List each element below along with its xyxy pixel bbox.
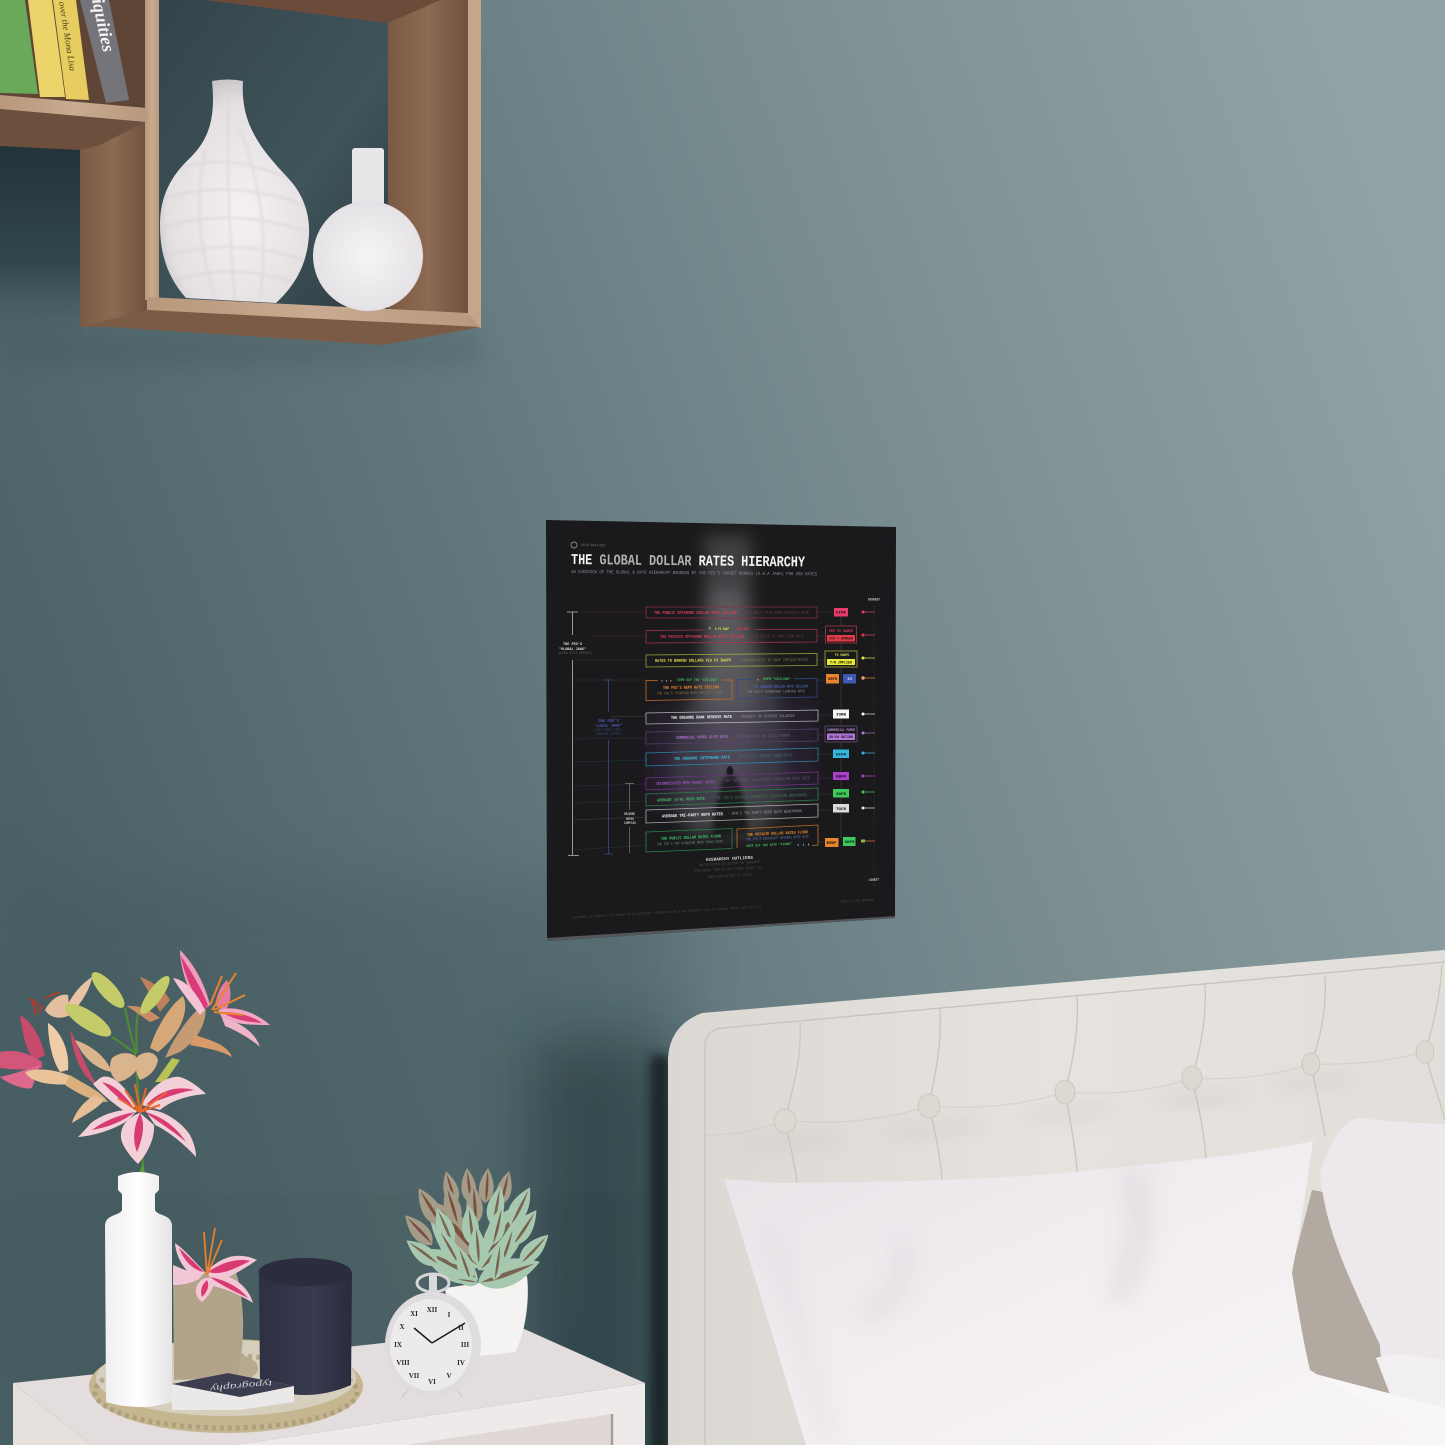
clock: hands (414, 1323, 465, 1343)
tag: commercial paper (825, 726, 857, 742)
tag: Fed FX swaps: FED FX SWAPS (829, 630, 853, 634)
plant: layered leaves (399, 1167, 554, 1288)
shelf: left column (80, 122, 147, 327)
left bracket: local jaws: (FED FUNDS CORR. (594, 727, 623, 732)
row: onshore bank reserve rate (646, 710, 818, 724)
nightstand: front band (235, 1383, 645, 1445)
row: intermediated repo market: - BNY OVERNIGHT COLLATERAL FINANCING REPO RATE (721, 776, 810, 784)
tag: EFFR: EFFR (836, 754, 847, 758)
pillow: main (724, 1141, 1412, 1445)
shelf: upper-left recess (0, 0, 145, 110)
bed: sheet (1300, 1370, 1445, 1445)
lily: small pink (173, 1228, 257, 1303)
tag: OBFR (833, 772, 849, 780)
tan pot (173, 1272, 243, 1380)
row: commercial paper: COMMERCIAL PAPER A2/P2 RATE (676, 735, 728, 741)
pillow: right lower (1376, 1355, 1445, 1410)
book: yellow spine (53, 0, 89, 100)
lily: large pink (78, 1077, 206, 1178)
disclaimer: DISCLAIMER: THIS GRAPHIC IS FOR INFORMATION AND EDUCATIONAL PURPOSES ONLY AND IS NOT INVESTMENT, LEGAL OR FINANCIAL ADVICE. VERIFY ALL DATA. (572, 905, 763, 919)
tag: SOFR ceiling (826, 674, 839, 684)
headboard: inner piping (705, 962, 1445, 1445)
tag: TGCR floor: SOFR (844, 841, 855, 845)
right scale: lowest label (869, 878, 880, 888)
poster: background (546, 520, 896, 941)
title: THE GLOBAL DOLLAR RATES HIERARCHY (571, 552, 805, 571)
shelf: left board top (0, 95, 147, 122)
right scale: lowest label: LOWEST (869, 878, 880, 883)
lily: centre peach (75, 1040, 158, 1082)
book on tray (172, 1373, 294, 1410)
row: onshore bank reserve rate: THE ONSHORE BANK RESERVE RATE (671, 715, 732, 721)
row: private offshore dollar rate ceiling: - THE FED'S FX SWAP LINE RATE (749, 634, 804, 639)
row: fed's repo rate ceiling (646, 678, 732, 700)
clock: numerals: XII (427, 1306, 438, 1314)
headboard: soft tufting shade (735, 1071, 1361, 1155)
subtitle: AN OVERVIEW OF THE GLOBAL $ RATE HIERARCHY BOUNDED BY THE FED'S TARGET RANGES (A.K.A JAWS) FOR USD RATES (571, 569, 817, 577)
clock: numerals: III (461, 1341, 469, 1349)
right scale: highest label (868, 594, 881, 602)
row: private dollar rates floor: THE PRIVATE DOLLAR RATES FLOOR (747, 830, 808, 838)
row: commercial paper: - AVERAGE RATE ON A2/A2 PAPER (733, 734, 790, 740)
headboard: buttons (774, 1041, 1434, 1133)
clock: numerals: IX (394, 1341, 402, 1349)
row: onshore dollar rate ceiling: THE ONSHORE DOLLAR RATE CEILING (753, 685, 808, 690)
plant: outer long leaves (414, 1193, 544, 1295)
faint guide lines (575, 606, 874, 876)
vase: round white bottle (313, 148, 423, 311)
row: average SOFR: - THE FED'S SECURED OVERNIGHT FINANCING BENCHMARK (711, 793, 807, 801)
tag: Fed FX swaps: CCS + SPREAD (829, 638, 853, 642)
clock: numerals: VIII (396, 1359, 410, 1367)
book: spine text: over the Mona Lisa (57, 1, 78, 72)
row: onshore dollar rate ceiling: SOFR "CEILING" (763, 677, 791, 682)
lily bouquet (0, 950, 270, 1178)
tag: FX swaps: FX SWAPS (835, 654, 849, 658)
tag: TGCR (833, 804, 849, 812)
right scale: highest label: HIGHEST (868, 598, 881, 602)
hierarchy outliers: HIERARCHY OUTLIERS (706, 856, 753, 863)
row: private dollar rates floor: SOFR GCF TGK BTFP "FLOOR" (746, 842, 792, 849)
shelf: lower board top (147, 297, 481, 328)
row: onshore interbank rate: - EFFECTIVE FEDERAL FUNDS RATE (735, 753, 792, 760)
tray (89, 1339, 363, 1433)
row: FX swap ceiling label (708, 625, 750, 632)
dark cup (258, 1258, 352, 1395)
tag: IM: IM (847, 678, 852, 682)
clock: top ring (417, 1274, 449, 1292)
tag: SOFR ceiling: SRFR (828, 678, 838, 682)
left bracket: secured repo complex: COMPLEX (624, 821, 636, 825)
book: grey (80, 0, 129, 103)
left bracket: local jaws: ONSHORE RATES) (596, 731, 621, 736)
left bracket: secured repo complex: REPOS (626, 817, 634, 821)
row: FX swaps: RATES TO BORROW DOLLARS VIA FX SWAPS (655, 658, 731, 664)
poster: silhouette (712, 766, 748, 838)
row: private offshore dollar rate ceiling (646, 630, 817, 643)
clock: numerals: I (448, 1311, 451, 1319)
shelf: left board underside (0, 109, 145, 150)
row: onshore dollar rate ceiling: ⇑ (757, 678, 759, 683)
row: average tri-party: AVERAGE TRI-PARTY REPO RATES (662, 812, 723, 819)
row: private dollar rates floor: THE FED'S OVERNIGHT REVERSE REPO RATE (746, 835, 810, 842)
alarm clock (385, 1274, 481, 1398)
book: green (0, 0, 38, 94)
hierarchy outliers: MORE EXPLANATION TO FOLLOW (708, 874, 753, 880)
pillow: fold shadows (770, 1170, 1140, 1445)
nightstand: leg edge (611, 1414, 613, 1445)
lily: right orange (150, 996, 232, 1082)
tag: FIMA (834, 608, 848, 616)
book: yellow (28, 0, 65, 97)
clock: numerals: XI (410, 1310, 418, 1318)
tag: TGCR: TGCR (836, 808, 847, 812)
row: average tri-party: - OFR'S TRI-PARTY REPO RATE BENCHMARK (728, 809, 802, 817)
bedding (724, 1118, 1445, 1445)
row: public offshore dollar rate ceiling: THE PUBLIC OFFSHORE DOLLAR RATE CEILING (654, 611, 737, 616)
tag: SOFR (833, 789, 849, 798)
clock: numerals (394, 1306, 469, 1386)
tag: IORB (833, 710, 849, 718)
wall shelf (0, 0, 481, 345)
clock: numerals: X (399, 1323, 405, 1331)
row: intermediated repo market (646, 772, 818, 790)
tag: Fed FX swaps (826, 626, 856, 643)
bed: shadow gap (1290, 1190, 1395, 1400)
clock: numerals: V (446, 1372, 452, 1380)
row: onshore interbank rate: THE ONSHORE INTERBANK RATE (674, 755, 730, 762)
row: public dollar rates floor (646, 828, 732, 852)
headboard: seams (705, 965, 1445, 1182)
clock: stem (429, 1274, 437, 1296)
row: public offshore dollar rate ceiling: - THE FED'S FIMA REPO FACILITY RATE (742, 611, 809, 616)
row: private offshore dollar rate ceiling: THE PRIVATE OFFSHORE DOLLAR RATE CEILING (660, 635, 744, 640)
row: onshore dollar rate ceiling (737, 677, 817, 698)
row: onshore bank reserve rate: - INTEREST ON RESERVE BALANCES (737, 714, 795, 720)
shelf: right inner side (388, 0, 468, 313)
row: average tri-party (646, 804, 818, 823)
tag: FIMA: FIMA (836, 612, 847, 616)
row: fed's repo rate ceiling: ⇑ ⇑ ⇑ (661, 679, 672, 684)
saucer (206, 1354, 258, 1382)
succulent plant (399, 1167, 554, 1357)
tag: TGCR floor (843, 837, 856, 846)
shelf: lower board front (80, 310, 481, 345)
left bracket: secured repo complex: SECURED (624, 812, 635, 816)
right scale: rate markers (861, 610, 875, 842)
right scale: lowest label: ↓ (873, 882, 875, 888)
tag: SOFR: SOFR (836, 793, 847, 797)
row: public offshore dollar rate ceiling (646, 607, 817, 618)
row: fed's repo rate ceiling: SOFR GCF TGK "CEILING" (677, 678, 718, 683)
row: intermediated repo market: INTERMEDIATED REPO MARKET RATES (656, 780, 715, 787)
tag: FX swaps: T/N IMPLIED (830, 660, 852, 666)
tag: ON RRP: RRP (826, 842, 836, 846)
hierarchy outliers: WHAT RATES MAY SIT OUTSIDE THE HIERARCHY? (699, 861, 761, 868)
shelf: top board (205, 0, 445, 23)
row: FX swap ceiling label: "CEILING" (735, 627, 750, 632)
clock: face (390, 1299, 472, 1391)
shelf: back panel (159, 0, 388, 320)
right scale: highest label: ↑ (872, 594, 874, 599)
tag: EFFR (833, 750, 849, 758)
tag: ON RRP (825, 838, 838, 847)
stems (112, 1008, 143, 1172)
row: private dollar rates floor (737, 825, 818, 849)
tag: commercial paper: COMMERCIAL PAPER (827, 729, 856, 733)
hierarchy outliers: TERM REPOS, TERM CP AND FUTURES RATES, ETC. (694, 866, 764, 874)
clock: feet (402, 1390, 462, 1397)
row: public dollar rates floor: THE PUBLIC DOLLAR RATES FLOOR (661, 834, 721, 842)
tag: IORB: IORB (836, 714, 847, 718)
left bracket: local jaws: THE FED'S (598, 719, 620, 724)
plant pot (445, 1276, 528, 1357)
clock: numerals: VII (409, 1372, 420, 1380)
headboard: shell (668, 950, 1445, 1445)
tag: FX swaps (825, 651, 857, 667)
vase: large white faceted (160, 80, 309, 303)
row: private dollar rates floor: ⇓ ⇓ ⇓ (797, 842, 810, 848)
row: average SOFR (646, 788, 818, 806)
clock: numerals: II (458, 1324, 464, 1332)
poster (546, 520, 896, 941)
book on tray: typography (210, 1379, 272, 1394)
row: onshore interbank rate (646, 748, 818, 766)
lily: upper left orange (45, 977, 92, 1018)
lily: buds (60, 968, 174, 1042)
books (0, 0, 129, 103)
tag: commercial paper: 30/60 RATING (829, 735, 853, 740)
shelf: centre post (145, 0, 159, 300)
nightstand: top (13, 1328, 645, 1445)
left bracket: global jaws (558, 612, 592, 856)
left bracket: secured repo complex (624, 783, 636, 853)
poster: bottom edge (547, 916, 895, 941)
clock: body (385, 1292, 481, 1398)
row: FX swap ceiling label: & FX SWAP (715, 628, 729, 632)
nightstand (13, 1328, 645, 1445)
row: FX swap ceiling label: ⇑ (708, 625, 711, 632)
poster: smoke image (650, 535, 815, 835)
row: FX swaps (646, 654, 817, 667)
credit: CAPITAL FLOWS RESEARCH (841, 899, 874, 903)
left bracket: global jaws: (GLOBAL RATES CORRIDOR) (558, 651, 592, 655)
logo (571, 542, 605, 548)
row: fed's repo rate ceiling: THE FED'S REPO RATE CEILING (663, 685, 719, 691)
tag: IM (843, 674, 856, 684)
hierarchy outliers (694, 856, 764, 880)
lily: right orange back (127, 977, 170, 1022)
left bracket: local jaws: "LOCAL JAWS" (595, 723, 622, 729)
clock: numerals: IV (457, 1359, 465, 1367)
lily: front left orange (25, 1023, 108, 1123)
white bottle vase (105, 1172, 172, 1407)
nightstand: left side (13, 1383, 92, 1445)
left bracket: global jaws: "GLOBAL JAWS" (559, 647, 586, 652)
tag: OBFR: OBFR (836, 776, 847, 780)
shelf: right rim (468, 0, 481, 328)
row: onshore dollar rate ceiling: THE FED'S OVERNIGHT LENDING RATE (747, 689, 806, 695)
nightstand: drawer panel (405, 1414, 612, 1445)
headboard (668, 950, 1445, 1445)
pillow: right (1320, 1118, 1445, 1410)
row: commercial paper (646, 729, 818, 744)
lily: top pink (173, 950, 270, 1047)
logo: CAPITAL FLOWS & ASSET (581, 544, 605, 548)
row: fed's repo rate ceiling: THE FED'S STANDING REPO FACILITY RATE (657, 691, 723, 696)
left bracket: local jaws (594, 680, 623, 854)
left bracket: global jaws: THE FED'S (563, 642, 583, 647)
row: average SOFR: AVERAGE (O/N) REPO RATE (657, 797, 705, 803)
clock: numerals: VI (428, 1378, 436, 1386)
row: FX swaps: - TOMORROW/NEXT FX SWAP IMPLIED RATES (737, 658, 808, 663)
shelf: dark recess left (0, 140, 82, 345)
row: public dollar rates floor: THE FED'S TMP STANDING REPO POOLS RATE (657, 839, 724, 847)
lily: back left pink (0, 992, 60, 1088)
